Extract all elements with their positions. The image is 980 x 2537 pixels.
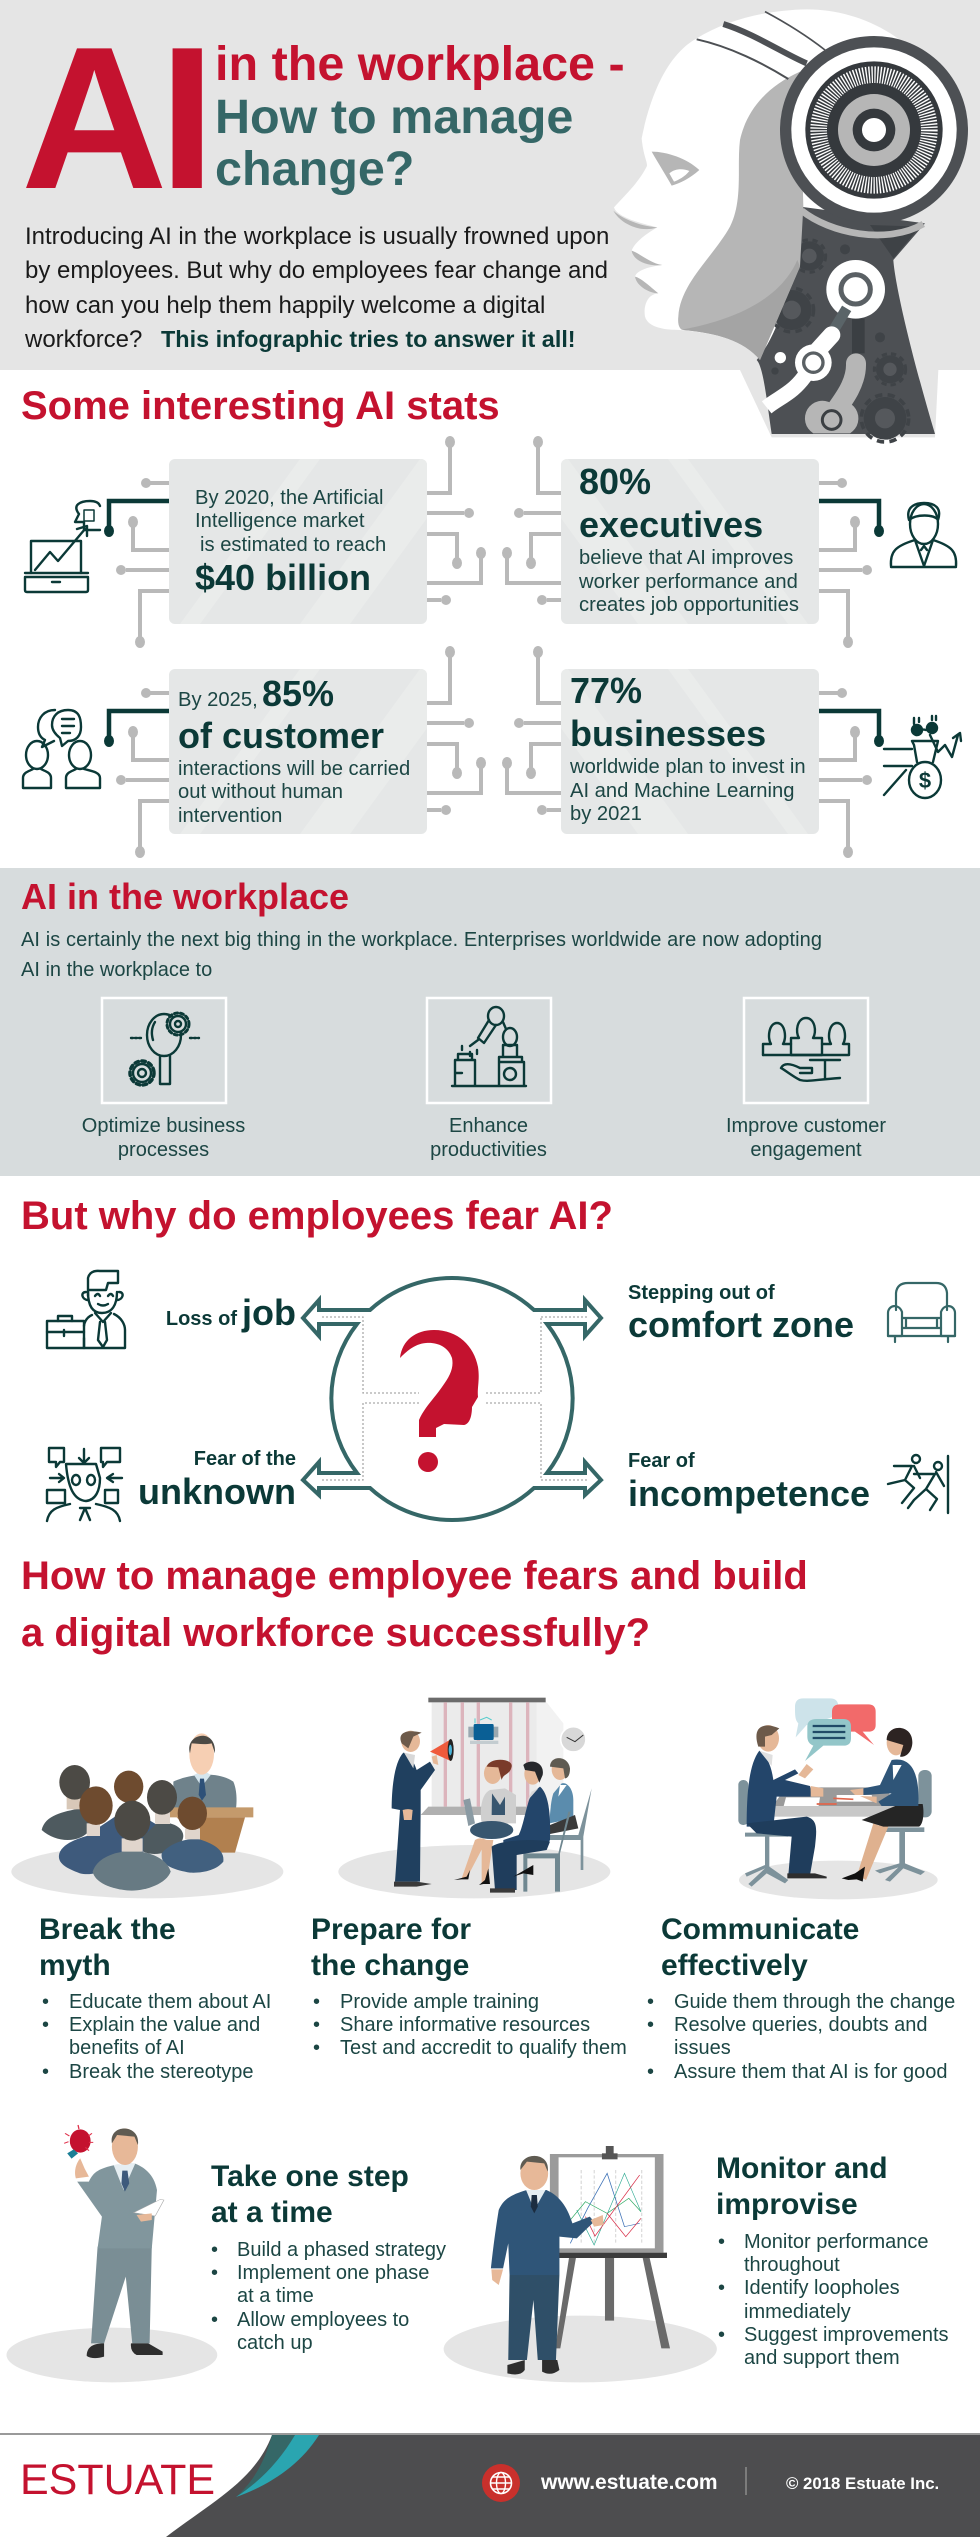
text: stepping out of comfort zone (628, 1282, 854, 1345)
heading: AI in the workplace: AI in the workplace (21, 876, 349, 917)
footer copyright: © 2018 Estuate Inc. (786, 2474, 939, 2493)
card: enhance productivities: productivities (430, 1139, 547, 1161)
panel: break the myth (39, 1913, 271, 2083)
icon: money bag and growth: $ (919, 768, 931, 793)
panel: stat card 4: AI and Machine Learning (570, 780, 794, 802)
panel: take one step at a time: at a time (211, 2196, 333, 2229)
title: change? (215, 142, 414, 196)
panel: stat card 2: 80% (579, 461, 651, 502)
panel: prepare for the change: Share informative resources (340, 2014, 590, 2036)
panel: take one step at a time: Implement one phase (237, 2262, 429, 2284)
intro paragraph: This infographic tries to answer it all! (161, 326, 576, 352)
icon: executive (891, 503, 956, 567)
title: How to manage (215, 90, 573, 144)
card: improve customer engagement: Improve customer (726, 1115, 886, 1137)
panel: break the myth: • (42, 1991, 49, 2013)
panel: monitor and improvise: throughout (744, 2254, 840, 2276)
heading: how to manage employee fears: a digital workforce successfully? (21, 1611, 650, 1655)
panel: stat card 3 (104, 646, 486, 858)
text: stepping out of comfort zone: Stepping out of (628, 1282, 775, 1304)
panel: communicate effectively: • (647, 1991, 654, 2013)
panel: take one step at a time: Allow employees to (237, 2309, 409, 2331)
illustration: man with idea bulb (7, 2125, 217, 2382)
panel: monitor and improvise (716, 2152, 949, 2369)
icon: man with briefcase (47, 1271, 125, 1348)
card: optimize business processes: Optimize business (82, 1115, 245, 1137)
panel: stat card 2: believe that AI improves (579, 547, 793, 569)
panel: stat card 3: By 2025, (178, 689, 258, 711)
panel: take one step at a time: • (211, 2262, 218, 2284)
panel: take one step at a time: catch up (237, 2332, 313, 2354)
panel: prepare for the change: • (313, 2014, 320, 2036)
panel: stat card 4: 77% (570, 670, 642, 711)
panel: communicate effectively: • (647, 2061, 654, 2083)
panel: stat card 3: interactions will be carried (178, 758, 410, 780)
card: optimize business processes (82, 998, 245, 1161)
text: stepping out of comfort zone: comfort zone (628, 1304, 854, 1345)
footer (0, 2433, 980, 2537)
panel: prepare for the change: • (313, 2037, 320, 2059)
panel: stat card 2 (502, 436, 884, 648)
title: in the workplace - (215, 37, 625, 91)
panel: stat card 4: worldwide plan to invest in (569, 756, 806, 778)
diagram: central circle with four arrows (303, 1278, 601, 1520)
icon: runners (888, 1455, 948, 1513)
panel: monitor and improvise: and support them (744, 2347, 900, 2369)
illustration: presenter with chart easel (444, 2146, 717, 2382)
heading: why employees fear AI: But why do employees fear AI? (21, 1194, 613, 1238)
panel: stat card 1: $40 billion (195, 557, 371, 598)
panel: break the myth: Break the stereotype (69, 2061, 254, 2083)
panel: monitor and improvise: immediately (744, 2301, 851, 2323)
icon: laptop with growth chart and AI head (25, 501, 100, 592)
intro paragraph: Introducing AI in the workplace is usually frowned upon (25, 223, 609, 250)
heading: some interesting AI stats: Some interesting AI stats (21, 384, 500, 428)
panel: take one step at a time: • (211, 2239, 218, 2261)
panel: break the myth: Educate them about AI (69, 1991, 271, 2013)
panel: monitor and improvise: • (718, 2277, 725, 2299)
text: fear of the unknown: unknown (138, 1471, 296, 1512)
intro paragraph: by employees. But why do employees fear change and (25, 257, 608, 284)
panel: stat card 1: is estimated to reach (200, 534, 386, 556)
text block: workplace intro (21, 929, 822, 981)
text: loss of job (166, 1292, 296, 1333)
icon: globe (482, 2464, 520, 2502)
panel: take one step at a time: • (211, 2309, 218, 2331)
panel: break the myth: myth (39, 1949, 111, 1982)
panel: monitor and improvise: Monitor and (716, 2152, 888, 2185)
panel: break the myth: • (42, 2061, 49, 2083)
icon: armchair (888, 1283, 955, 1342)
illustration: speaker with megaphone and team (338, 1698, 610, 1898)
panel: take one step at a time: Build a phased strategy (237, 2239, 446, 2261)
panel: communicate effectively: Communicate (661, 1913, 859, 1946)
panel: break the myth: benefits of AI (69, 2037, 185, 2059)
panel: prepare for the change: Prepare for (311, 1913, 471, 1946)
panel: monitor and improvise: • (718, 2324, 725, 2346)
panel: break the myth: • (42, 2014, 49, 2036)
panel: stat card 1: By 2020, the Artificial (195, 487, 384, 509)
intro paragraph: how can you help them happily welcome a digital (25, 292, 545, 319)
panel: stat card 3: of customer (178, 715, 384, 756)
text: fear of incompetence (628, 1450, 870, 1514)
panel: prepare for the change: • (313, 1991, 320, 2013)
panel: stat card 2: worker performance and (578, 571, 798, 593)
panel: take one step at a time: Take one step (211, 2160, 409, 2193)
icon: customers talking (23, 710, 100, 788)
panel: stat card 3: out without human (178, 781, 343, 803)
panel: stat card 4: businesses (570, 713, 766, 754)
text: loss of job: Loss of (166, 1308, 237, 1330)
panel: communicate effectively: Resolve queries, doubts and (674, 2014, 928, 2036)
panel: monitor and improvise: • (718, 2231, 725, 2253)
icon: question mark with face profile (400, 1330, 479, 1472)
panel: stat card 1: Intelligence market (195, 510, 365, 532)
title (21, 5, 625, 232)
card: improve customer engagement (726, 998, 886, 1161)
panel: monitor and improvise: Suggest improvements (744, 2324, 949, 2346)
intro paragraph (24, 223, 609, 353)
panel: stat card 3: intervention (178, 805, 282, 827)
panel: break the myth: Break the (39, 1913, 176, 1946)
text: fear of incompetence: Fear of (628, 1450, 695, 1472)
icon: money bag and growth (884, 716, 961, 798)
panel: prepare for the change (311, 1913, 627, 2059)
panel: communicate effectively: Guide them through the change (674, 1991, 955, 2013)
panel: stat card 2: creates job opportunities (579, 594, 799, 616)
panel: communicate effectively: • (647, 2014, 654, 2036)
panel: prepare for the change: Test and accredit to qualify them (340, 2037, 627, 2059)
title: AI (21, 5, 215, 232)
text: fear of the unknown: Fear of the (194, 1448, 296, 1470)
panel: stat card 1 (104, 436, 486, 648)
text: fear of incompetence: incompetence (628, 1473, 870, 1514)
text: fear of the unknown (138, 1448, 296, 1512)
panel: prepare for the change: the change (311, 1949, 469, 1982)
illustration: two people at a meeting table (738, 1698, 938, 1899)
logo: ESTUATE: ESTUATE (20, 2456, 215, 2504)
panel: monitor and improvise: Identify loopholes (744, 2277, 900, 2299)
panel: stat card 3: 85% (262, 673, 334, 714)
footer website: www.estuate.com (540, 2471, 718, 2494)
panel: monitor and improvise: improvise (716, 2188, 858, 2221)
panel: prepare for the change: Provide ample training (340, 1991, 539, 2013)
panel: take one step at a time: at a time (237, 2285, 314, 2307)
panel: communicate effectively: Assure them that AI is for good (674, 2061, 947, 2083)
header background (0, 0, 980, 370)
text block: workplace intro: AI in the workplace to (21, 959, 212, 981)
icon: confused person (47, 1448, 122, 1521)
panel: stat card 4 (502, 646, 884, 858)
panel: monitor and improvise: Monitor performance (744, 2231, 929, 2253)
panel: communicate effectively: issues (674, 2037, 731, 2059)
panel: communicate effectively (647, 1913, 955, 2083)
panel: AI in the workplace (0, 868, 980, 1176)
text block: workplace intro: AI is certainly the next big thing in the workplace. Enterprises worldwide are now adopting (21, 929, 822, 951)
panel: stat card 4: by 2021 (570, 803, 642, 825)
card: optimize business processes: processes (118, 1139, 209, 1161)
panel: break the myth: Explain the value and (69, 2014, 260, 2036)
card: enhance productivities: Enhance (449, 1115, 528, 1137)
panel: communicate effectively: effectively (661, 1949, 808, 1982)
heading: how to manage employee fears (21, 1554, 808, 1655)
text: loss of job: job (241, 1292, 296, 1333)
panel: stat card 2: executives (579, 504, 763, 545)
card: improve customer engagement: engagement (750, 1139, 862, 1161)
illustration: audience and speaker (11, 1733, 283, 1898)
heading: how to manage employee fears: How to manage employee fears and build (21, 1554, 808, 1598)
panel: take one step at a time (211, 2160, 446, 2354)
card: enhance productivities (427, 998, 551, 1161)
intro paragraph: workforce? (24, 326, 142, 353)
illustration: robot head (613, 9, 968, 442)
